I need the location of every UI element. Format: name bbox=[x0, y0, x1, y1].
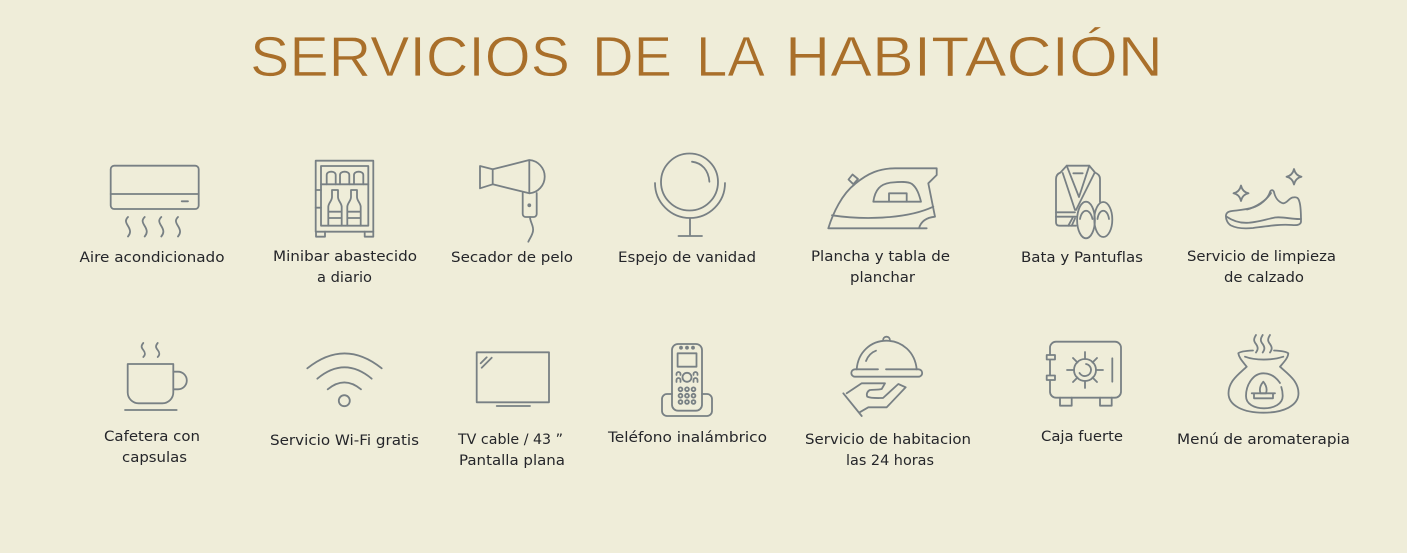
title: HABITACIÓN bbox=[785, 25, 1163, 89]
service: vanity mirror bbox=[618, 154, 756, 266]
service: phone bbox=[607, 344, 767, 446]
service: aromatherapy bbox=[1177, 335, 1350, 448]
title: DE bbox=[592, 25, 672, 89]
label: Servicio Wi-Fi gratis bbox=[270, 433, 419, 449]
service: shoe cleaning bbox=[1187, 169, 1336, 286]
service: air conditioning bbox=[80, 166, 224, 266]
title: LA bbox=[696, 25, 765, 89]
label: Menú de aromaterapia bbox=[1177, 432, 1350, 448]
service: wi-fi bbox=[270, 353, 419, 449]
label: Secador de pelo bbox=[451, 250, 573, 266]
service: robe and slippers bbox=[1021, 166, 1143, 266]
label bbox=[811, 249, 950, 286]
label: Espejo de vanidad bbox=[618, 250, 756, 266]
label: TV cable / 43 ” bbox=[457, 432, 563, 448]
icon: safe bbox=[1047, 342, 1121, 406]
label: Servicio de habitacion bbox=[805, 432, 971, 448]
label bbox=[1187, 249, 1336, 286]
service: minibar bbox=[273, 161, 417, 286]
title bbox=[250, 25, 1163, 89]
label: a diario bbox=[317, 270, 372, 286]
title: SERVICIOS bbox=[250, 25, 570, 89]
label: Pantalla plana bbox=[459, 453, 565, 469]
icon: television bbox=[477, 352, 549, 406]
label: Plancha y tabla de bbox=[811, 249, 950, 265]
icon: iron bbox=[828, 168, 937, 228]
label: Bata y Pantuflas bbox=[1021, 250, 1143, 266]
service: iron bbox=[811, 168, 950, 286]
label: planchar bbox=[850, 270, 915, 286]
icon: wi-fi bbox=[307, 353, 382, 406]
icon: minibar bbox=[316, 161, 373, 237]
service: hair dryer bbox=[451, 160, 573, 266]
icon: vanity mirror bbox=[655, 154, 725, 236]
label: de calzado bbox=[1224, 270, 1304, 286]
label: Caja fuerte bbox=[1041, 429, 1123, 445]
icon: shoe with sparkles bbox=[1226, 169, 1302, 228]
service: coffee maker bbox=[104, 343, 200, 466]
label bbox=[805, 432, 971, 469]
icon: cloche on hand bbox=[843, 337, 922, 416]
icon: oil burner bbox=[1228, 335, 1298, 413]
label bbox=[457, 432, 565, 469]
label: las 24 horas bbox=[846, 453, 934, 469]
label bbox=[273, 249, 417, 286]
icon: cordless phone bbox=[662, 344, 712, 416]
icon: coffee cup bbox=[125, 343, 187, 410]
icon: robe and slippers bbox=[1056, 166, 1112, 238]
label: Servicio de limpieza bbox=[1187, 249, 1336, 265]
icon: air conditioner bbox=[111, 166, 199, 236]
label: capsulas bbox=[122, 450, 187, 466]
service: tv bbox=[457, 352, 565, 469]
label: Aire acondicionado bbox=[80, 250, 224, 266]
service: safe bbox=[1041, 342, 1123, 445]
label: Cafetera con bbox=[104, 429, 200, 445]
service: room service bbox=[805, 337, 971, 469]
label: Teléfono inalámbrico bbox=[607, 430, 767, 446]
label bbox=[104, 429, 200, 466]
icon: hair dryer bbox=[480, 160, 545, 242]
label: Minibar abastecido bbox=[273, 249, 417, 265]
